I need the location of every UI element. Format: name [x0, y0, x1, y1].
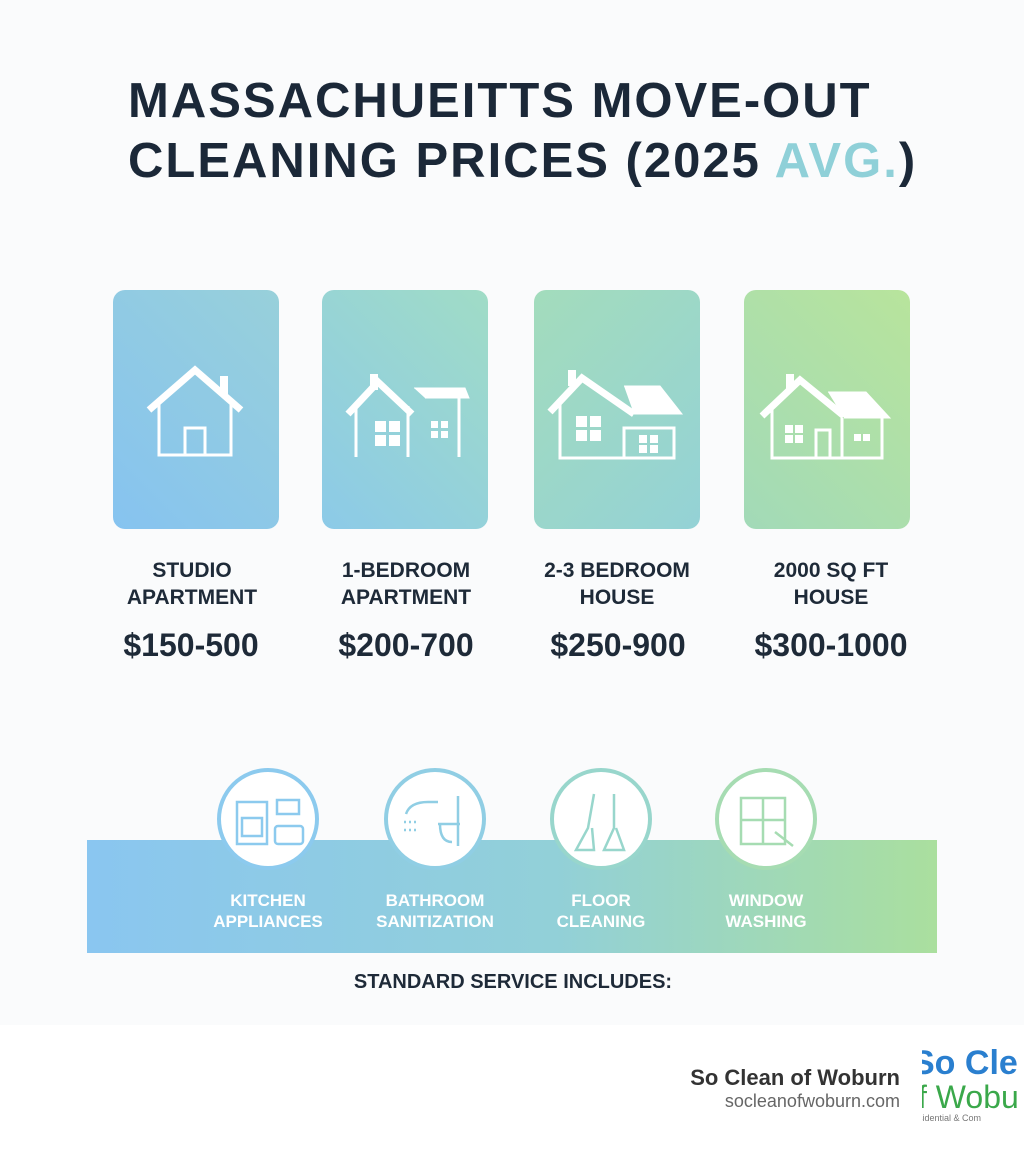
- card: studio: [113, 290, 279, 529]
- label: window: WINDOW: [729, 891, 803, 910]
- label: window: WASHING: [725, 912, 807, 931]
- label: 1-bedroom: 1-BEDROOM: [342, 559, 470, 582]
- label: floor: [557, 891, 645, 931]
- title: CLEANING PRICES (2025 AVG.): [128, 134, 917, 188]
- caption: STANDARD SERVICE INCLUDES:: [354, 971, 672, 993]
- label: bathroom: [376, 891, 494, 931]
- label: floor: FLOOR: [571, 891, 631, 910]
- price: 1-bedroom: $200-700: [338, 627, 474, 663]
- label: window: [725, 891, 807, 931]
- title: MASSACHUEITTS MOVE-OUT: [128, 74, 872, 128]
- icon: window: [715, 768, 817, 870]
- icon: bathroom: [384, 768, 486, 870]
- footer text: socleanofwoburn.com: [725, 1091, 900, 1111]
- label: studio: [127, 559, 257, 609]
- label: bathroom: BATHROOM: [386, 891, 484, 910]
- label: 1-bedroom: [341, 559, 471, 609]
- label: studio: STUDIO: [152, 559, 232, 582]
- icon: kitchen: [217, 768, 319, 870]
- card: 2-3 bedroom: [534, 290, 700, 529]
- footer text: So Clean of Woburn: [690, 1065, 900, 1090]
- label: 2-3 bedroom: 2-3 BEDROOM: [544, 559, 690, 582]
- label: studio: APARTMENT: [127, 586, 257, 609]
- title: [128, 74, 917, 188]
- label: kitchen: [213, 891, 323, 931]
- price: 2-3 bedroom: $250-900: [550, 627, 686, 663]
- label: 2000 sq ft: [774, 559, 888, 609]
- icon: floor: [550, 768, 652, 870]
- price: studio: $150-500: [123, 627, 259, 663]
- services band: [87, 840, 937, 953]
- label: 2-3 bedroom: [544, 559, 690, 609]
- price: 2000 sq ft: $300-1000: [754, 627, 908, 663]
- label: 2000 sq ft: 2000 SQ FT: [774, 559, 888, 582]
- footer: [0, 1025, 1024, 1154]
- footer text: [690, 1065, 900, 1111]
- label: floor: CLEANING: [557, 912, 645, 931]
- label: 2000 sq ft: HOUSE: [794, 586, 868, 609]
- label: bathroom: SANITIZATION: [376, 912, 494, 931]
- card: 2000 sq ft: [744, 290, 910, 529]
- logo: [922, 1045, 1019, 1123]
- label: kitchen: APPLIANCES: [213, 912, 323, 931]
- card: 1-bedroom: [322, 290, 488, 529]
- label: kitchen: KITCHEN: [230, 891, 306, 910]
- label: 2-3 bedroom: HOUSE: [580, 586, 654, 609]
- label: 1-bedroom: APARTMENT: [341, 586, 471, 609]
